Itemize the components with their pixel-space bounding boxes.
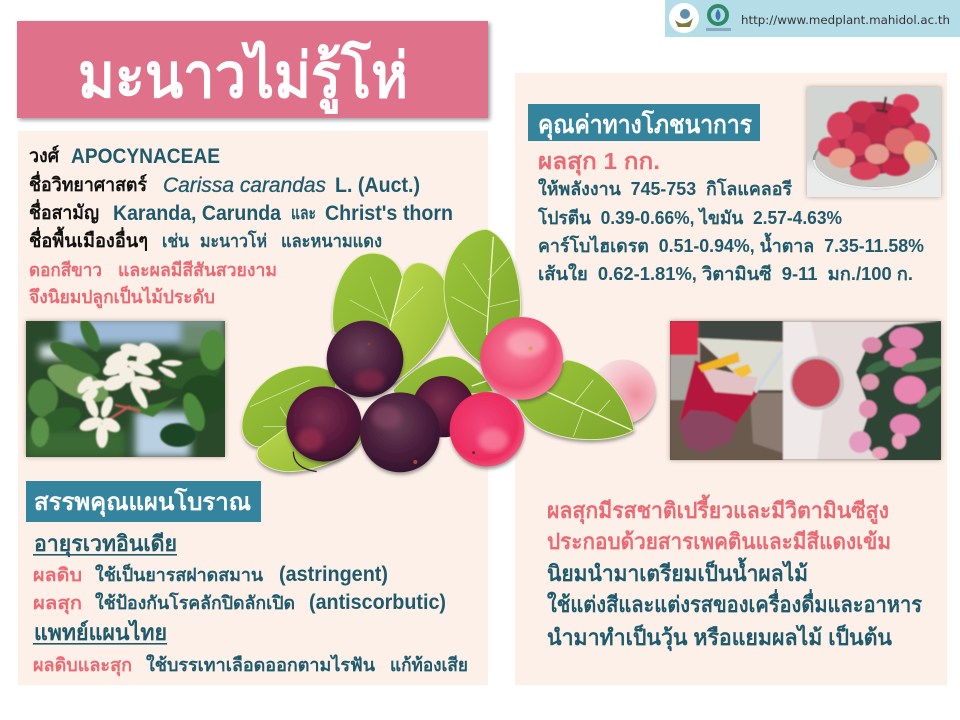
text block: taxonomy [29,145,453,309]
text block: traditional uses: แพทย์แผนไทย [34,619,167,645]
text block: taxonomy: ชื่อสามัญ [29,199,99,224]
heading: traditional uses [26,481,261,522]
text block: traditional uses: ผลสุก [33,593,82,615]
text block: taxonomy: และผลมีสีสันสวยงาม [118,260,277,280]
text block: uses of ripe fruit: ประกอบด้วยสารเพคตินและมีสีแดงเข้ม [547,529,891,554]
title banner [17,21,488,118]
text block: taxonomy: มะนาวโห่ [200,230,267,251]
text block: taxonomy: Carissa carandas [163,174,326,197]
text block: traditional uses: ผลดิบ [33,565,82,585]
text block: taxonomy: เช่น [162,231,190,251]
text block: taxonomy: ชื่อพื้นเมืองอื่นๆ [29,226,148,252]
text block: nutrition values: คาร์โบไฮเดรต 0.51-0.94%, น้ำตาล 7.35-11.58% [538,232,924,256]
text block: taxonomy: จึงนิยมปลูกเป็นไม้ประดับ [29,285,215,309]
text block: traditional uses: ผลดิบและสุก [33,655,132,677]
fruit: pink lower [450,392,524,467]
heading: nutrition: คุณค่าทางโภชนาการ [538,109,753,141]
title text: มะนาวไม่รู้โห่ [78,39,408,114]
text block: taxonomy: Christ's thorn [325,202,453,225]
fruit: dark front [360,392,440,472]
fruit: pink upper [480,317,563,400]
text block: traditional uses: ใช้เป็นยารสฝาดสมาน [95,563,264,585]
text block: uses of ripe fruit: นิยมนำมาเตรียมเป็นน้ำผลไม้ [547,557,808,586]
text block: traditional uses: แก้ท้องเสีย [390,655,468,675]
fruit: pale pink [591,360,655,424]
website url: http://www.medplant.mahidol.ac.th [741,13,950,27]
text block: taxonomy: วงศ์ [29,145,60,167]
text block: traditional uses: อายุรเวทอินเดีย [34,531,177,558]
icon: anniversary logo [669,3,699,33]
leaves [242,229,634,472]
text block: nutrition values [537,148,924,284]
text block: nutrition values: ให้พลังงาน 745-753 กิโลแคลอรี [538,178,792,199]
illustration: karanda fruits and leaves [242,229,655,472]
heading: nutrition [528,104,760,141]
text block: nutrition values: โปรตีน 0.39-0.66%, ไขมัน 2.57-4.63% [537,207,842,228]
text block: nutrition values: เส้นใย 0.62-1.81%, วิตามินซี 9-11 มก./100 ก. [538,263,913,284]
icon: green and blue logo [706,6,731,31]
text block: taxonomy: Karanda, Carunda [113,202,281,225]
text block: uses of ripe fruit: ใช้แต่งสีและแต่งรสของเครื่องดื่มและอาหาร [547,588,922,617]
photo: red drinks and pink flowers [670,321,946,460]
panel: right background [515,73,947,685]
text block: traditional uses: (antiscorbutic) [309,591,446,614]
text block: taxonomy: และหนามแดง [281,231,382,251]
text block: uses of ripe fruit: ผลสุกมีรสชาติเปรี้ยวและมีวิตามินซีสูง [547,494,889,525]
text block: traditional uses [33,531,468,677]
text block: nutrition values: ผลสุก 1 กก. [538,148,660,176]
text block: taxonomy: และ [291,203,316,223]
text block: traditional uses: ใช้ป้องกันโรคลักปิดลักเปิด [95,592,295,613]
fruit: dark top [327,321,403,397]
text block: uses of ripe fruit: นำมาทำเป็นวุ้น หรือแยมผลไม้ เป็นต้น [547,623,892,652]
heading: traditional uses: สรรพคุณแผนโบราณ [34,487,251,518]
photo: white flowers [26,316,229,457]
photo: fruits in glass bowl [800,87,950,205]
header bar: website and logos [665,0,960,37]
fruit: dark left [286,386,362,462]
text block: taxonomy: APOCYNACEAE [71,145,220,168]
panel: left background [18,131,488,685]
text block: taxonomy: ชื่อวิทยาศาสตร์ [29,171,148,196]
text block: uses of ripe fruit [547,494,922,652]
text block: traditional uses: (astringent) [279,563,388,586]
text block: taxonomy: ดอกสีขาว [29,260,102,280]
fruit: dark back [413,376,474,437]
text block: traditional uses: ใช้บรรเทาเลือดออกตามไรฟัน [146,654,376,675]
text block: taxonomy: L. (Auct.) [335,174,420,197]
